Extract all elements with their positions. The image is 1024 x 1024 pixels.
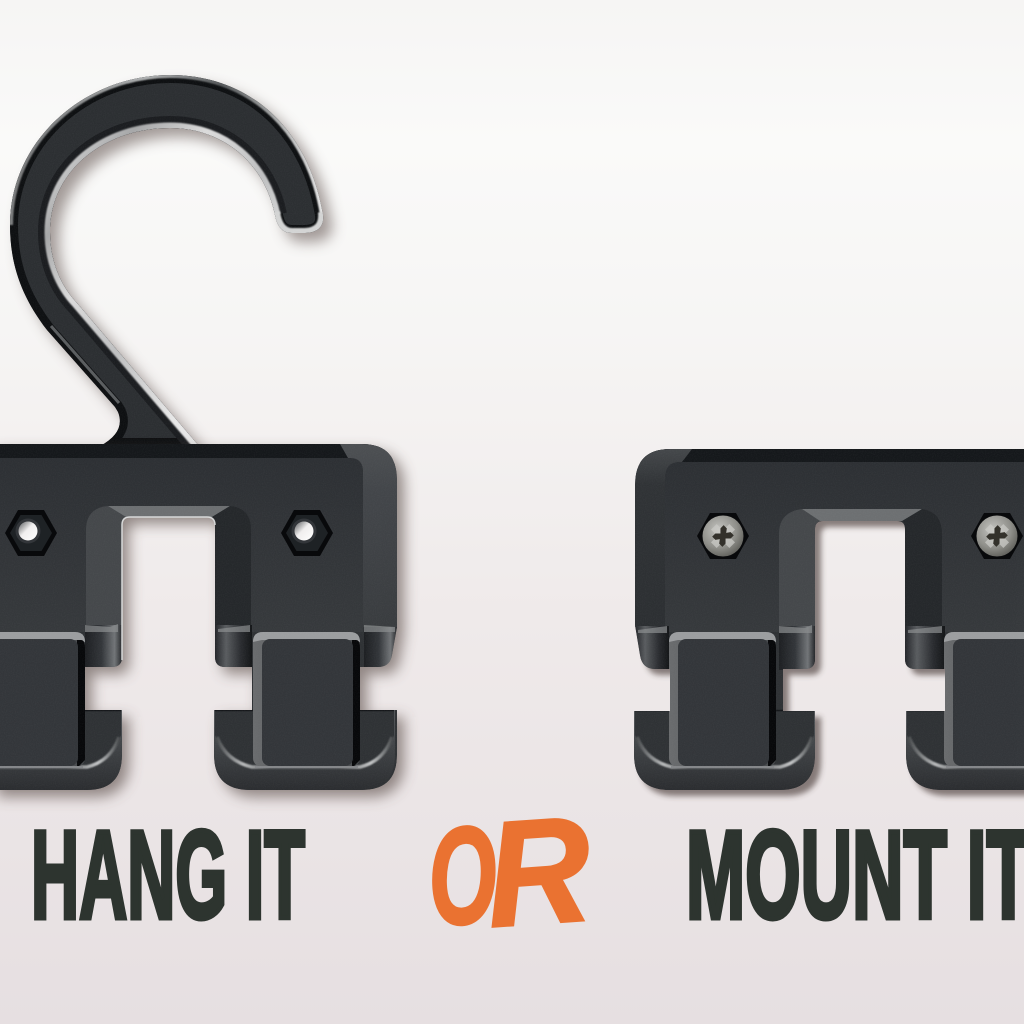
right bracket shadow (640, 455, 1024, 796)
window channel bevels (86, 506, 126, 626)
hex nut left (5, 510, 57, 556)
window channel bevels (779, 509, 820, 626)
label: hang it: HANG IT (31, 806, 305, 945)
window inner rim highlight (122, 517, 215, 660)
label: or: R (481, 784, 596, 959)
feet (214, 710, 395, 790)
hex nut right (281, 510, 333, 556)
left bracket: hang version (0, 444, 420, 797)
hook shadow (19, 84, 332, 455)
screw left (697, 513, 749, 559)
feet (634, 710, 815, 790)
hook (0, 60, 340, 455)
label: or (425, 784, 596, 959)
right bracket body (630, 444, 1024, 794)
screw right (971, 513, 1023, 559)
hook body (10, 75, 324, 444)
clip plates (669, 632, 776, 768)
right bracket: mount version (630, 444, 1024, 796)
left bracket shadow (0, 451, 404, 797)
left bracket body (0, 444, 420, 794)
label: or: O (425, 798, 500, 955)
lower tabs (85, 625, 122, 668)
clip plates (253, 632, 360, 768)
lower tabs (779, 626, 815, 670)
